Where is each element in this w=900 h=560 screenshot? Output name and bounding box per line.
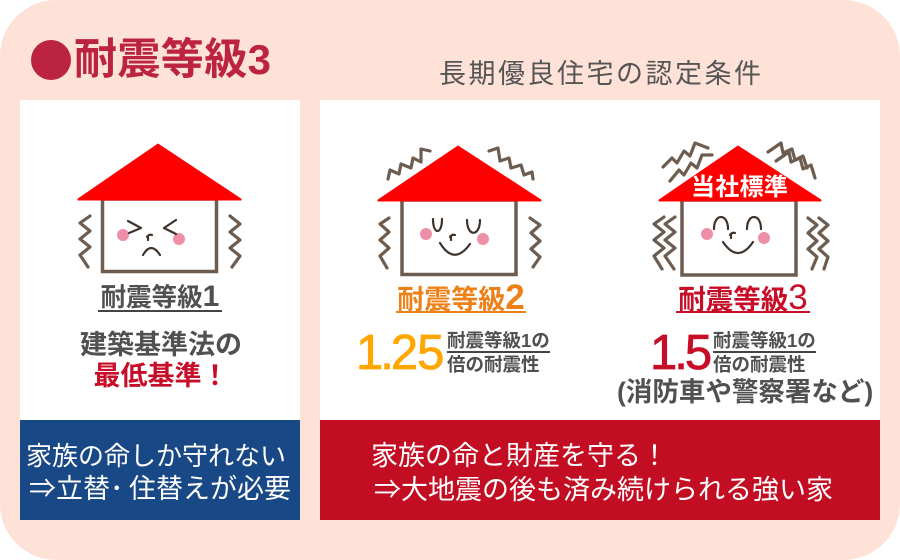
icon: house grade 3 [654,143,828,275]
grade 2 note: 耐震等級1の [447,330,550,351]
grade 2 note line 2: 倍の耐震性 [447,354,540,375]
icon: house grade 1 [78,144,241,272]
title [31,36,271,84]
banner text line 1: 家族の命しか守れない [26,441,286,471]
grade 3 label: 耐震等級3 [678,278,808,317]
grade 1 description [80,330,242,391]
title text: 耐震等級3 [74,36,271,84]
banner text line 2: ⇒立替･住替えが必要 [29,467,291,506]
roof label: company standard: 当社標準 [691,174,788,201]
grade 3 note: 耐震等級1の [713,330,816,351]
banner: grade 1 outcome [20,420,300,520]
panel: grades 2 and 3 [320,100,880,420]
banner text line 2: ⇒大地震の後も済み続けられる強い家 [374,468,833,507]
grade 1 description: 建築基準法の [80,330,242,360]
grade 3 examples: (消防車や警察署など) [617,377,873,407]
grade 1 label: 耐震等級1 [101,280,219,313]
grade 3 note line 2: 倍の耐震性 [713,354,806,375]
panel: grade 1 [20,100,300,420]
heading: long-term housing conditions: 長期優良住宅の認定条件 [439,59,764,89]
grade 3 multiplier: 1.5 [650,326,712,380]
grade 1 description: 最低基準！ [94,361,228,391]
grade 2 label: 耐震等級2 [397,278,525,317]
icon: house grade 2 [378,146,541,274]
title bullet [31,40,71,80]
grade 2 multiplier: 1.25 [356,326,444,380]
banner text line 1: 家族の命と財産を守る！ [371,441,668,471]
banner: grade 2-3 outcome [320,420,880,520]
